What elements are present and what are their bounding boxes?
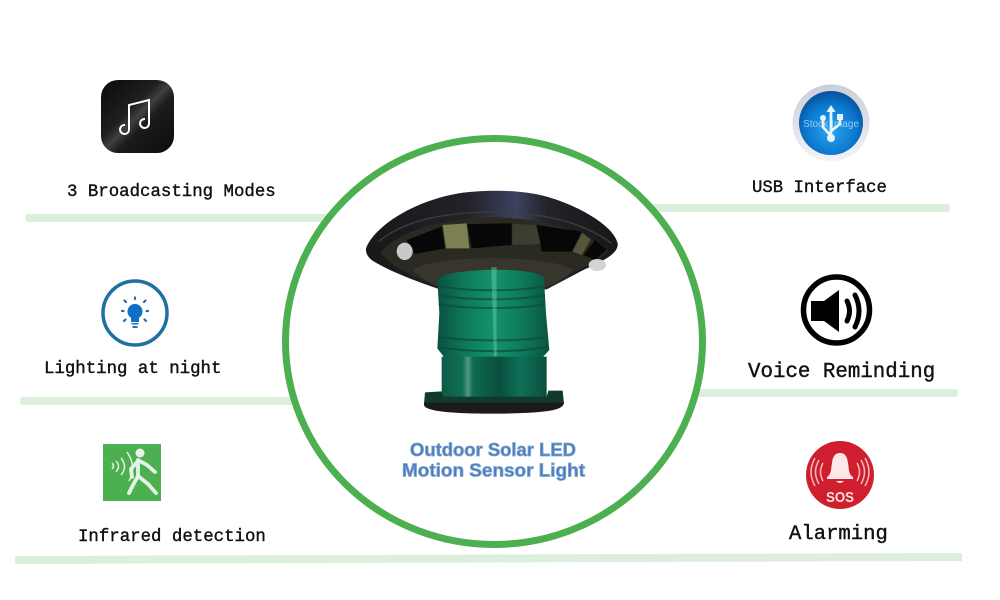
lens highlight <box>491 267 497 357</box>
icon: infrared detection <box>103 444 161 501</box>
icon: SOS alarm bell: SOS <box>826 489 854 506</box>
icon: USB <box>792 84 870 162</box>
solar panels <box>407 223 607 260</box>
divider: middle right <box>688 389 958 397</box>
divider: bottom <box>15 553 962 564</box>
icon: speaker <box>804 277 870 343</box>
lamp canopy <box>366 191 618 289</box>
label: Infrared detection: Infrared detection <box>78 528 266 547</box>
label: Voice Reminding: Voice Reminding <box>748 361 935 384</box>
icon: light bulb <box>103 281 167 345</box>
icon: SOS alarm bell <box>806 441 874 509</box>
divider: upper right <box>652 204 950 212</box>
label: Alarming: Alarming <box>789 523 888 546</box>
olive panel highlights <box>443 223 591 255</box>
lens ridges <box>438 286 548 351</box>
label: USB Interface: USB Interface <box>752 179 887 198</box>
product photo: solar lamp <box>366 191 618 414</box>
base rim <box>424 403 564 414</box>
canopy underside <box>381 217 608 286</box>
label: Lighting at night: Lighting at night <box>44 360 221 379</box>
product caption <box>402 440 585 480</box>
icon: music note <box>101 80 174 153</box>
central green ring <box>286 138 702 544</box>
base flange <box>424 391 564 404</box>
icon: USB: Stock Image <box>803 119 859 130</box>
left motion sensor <box>397 243 413 260</box>
right motion sensor <box>589 259 606 271</box>
divider: middle left <box>20 397 305 405</box>
caption line 1: Outdoor Solar LED <box>410 440 576 460</box>
green base cylinder <box>442 357 547 398</box>
green lens <box>437 270 549 358</box>
caption line 2: Motion Sensor Light <box>402 460 585 480</box>
divider: upper left <box>25 214 330 222</box>
lower hub <box>413 258 573 287</box>
canopy rim band <box>378 212 612 243</box>
label: 3 Broadcasting Modes: 3 Broadcasting Modes <box>67 183 276 202</box>
